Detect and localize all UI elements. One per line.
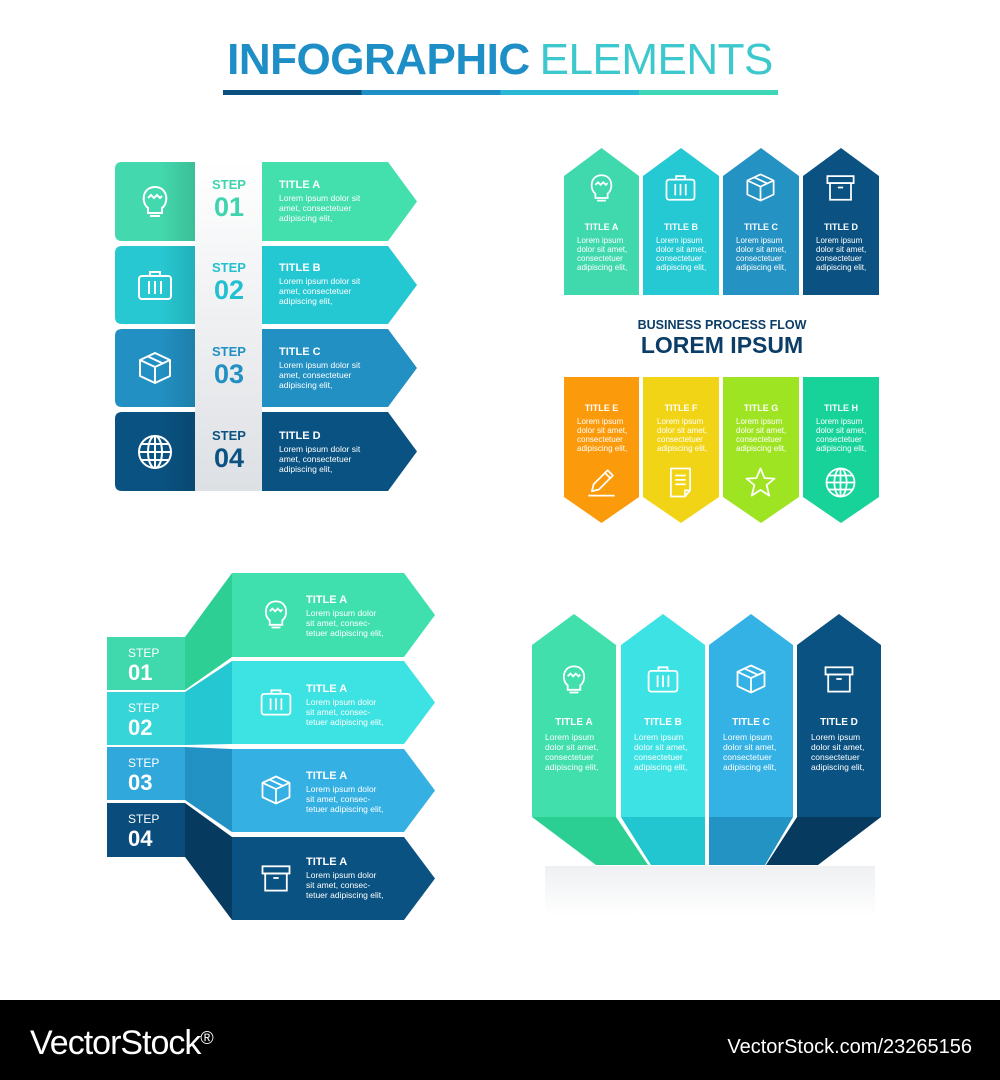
column F <box>643 377 719 523</box>
column C: dolor sit amet, <box>723 742 776 752</box>
column B: dolor sit amet, <box>634 742 687 752</box>
row 4 <box>107 803 435 920</box>
step 02 row: 02 <box>214 275 244 305</box>
column D: consectetuer <box>816 254 862 263</box>
column C <box>723 148 799 295</box>
column F: adipiscing elit, <box>657 444 707 453</box>
row 4: Lorem ipsum dolor <box>306 870 377 880</box>
column A <box>532 614 648 865</box>
row 1 <box>107 573 435 690</box>
column C: TITLE C <box>732 717 770 728</box>
step 01 row <box>115 162 417 241</box>
footer bar: VectorStock® <box>30 1024 213 1062</box>
row 4: STEP <box>128 812 159 826</box>
row 3 <box>107 747 435 832</box>
step 04 row: adipiscing elit, <box>279 464 332 474</box>
step 02 row: amet, consectetuer <box>279 286 351 296</box>
row 3: tetuer adipiscing elit, <box>306 804 384 814</box>
footer bar: VectorStock.com/23265156 <box>727 1036 972 1058</box>
title: INFOGRAPHICELEMENTS <box>227 35 773 84</box>
panel: business process flow top-right <box>564 148 879 523</box>
column F: dolor sit amet, <box>657 426 707 435</box>
column B <box>621 614 705 865</box>
step 01 row: adipiscing elit, <box>279 213 332 223</box>
step 04 row: TITLE D <box>279 430 321 442</box>
column A: consectetuer <box>545 752 594 762</box>
row 3: 03 <box>128 770 152 795</box>
row 4: 04 <box>128 826 153 851</box>
column E <box>564 377 639 523</box>
row 3: STEP <box>128 756 159 770</box>
panel: 3D columns bottom-right <box>532 614 881 916</box>
step 03 row: adipiscing elit, <box>279 380 332 390</box>
step 01 row: 01 <box>214 192 244 222</box>
row 3: sit amet, consec- <box>306 794 370 804</box>
column H: Lorem ipsum <box>816 417 863 426</box>
step 04 row: STEP <box>212 428 246 443</box>
step 02 row: Lorem ipsum dolor sit <box>279 276 361 286</box>
step 03 row <box>115 329 417 407</box>
row 1: sit amet, consec- <box>306 618 370 628</box>
column F: TITLE F <box>664 403 698 413</box>
row 2: tetuer adipiscing elit, <box>306 717 384 727</box>
column C: dolor sit amet, <box>736 245 786 254</box>
column A: dolor sit amet, <box>577 245 627 254</box>
column E: Lorem ipsum <box>577 417 624 426</box>
row 4: tetuer adipiscing elit, <box>306 890 384 900</box>
heading: business process flow: BUSINESS PROCESS FLOW <box>638 318 807 332</box>
footer bar <box>0 1000 1000 1080</box>
heading: business process flow <box>638 318 807 358</box>
row 2 <box>107 661 435 745</box>
column A: Lorem ipsum <box>545 732 594 742</box>
column B: Lorem ipsum <box>656 236 703 245</box>
column D: Lorem ipsum <box>811 732 860 742</box>
row 4: sit amet, consec- <box>306 880 370 890</box>
step 02 row: adipiscing elit, <box>279 296 332 306</box>
row 2: Lorem ipsum dolor <box>306 697 377 707</box>
column C <box>709 614 793 865</box>
step 01 row: TITLE A <box>279 179 320 191</box>
column C: consectetuer <box>723 752 772 762</box>
column D <box>803 148 879 295</box>
row 1: STEP <box>128 646 159 660</box>
heading: business process flow: LOREM IPSUM <box>641 332 803 358</box>
step 03 row: amet, consectetuer <box>279 370 351 380</box>
column C: Lorem ipsum <box>723 732 772 742</box>
column C: adipiscing elit, <box>723 762 776 772</box>
column A: dolor sit amet, <box>545 742 598 752</box>
step 03 row: STEP <box>212 344 246 359</box>
step 03 row: TITLE C <box>279 346 321 358</box>
panel: folded step arrows bottom-left <box>107 573 435 920</box>
column B: dolor sit amet, <box>656 245 706 254</box>
column G <box>723 377 799 523</box>
step 02 row <box>115 246 417 324</box>
column D: adipiscing elit, <box>811 762 864 772</box>
step 04 row: Lorem ipsum dolor sit <box>279 444 361 454</box>
column D: dolor sit amet, <box>816 245 866 254</box>
column B: TITLE B <box>664 222 698 232</box>
column D: consectetuer <box>811 752 860 762</box>
step 02 row: TITLE B <box>279 262 321 274</box>
row 1: Lorem ipsum dolor <box>306 608 377 618</box>
column D: Lorem ipsum <box>816 236 863 245</box>
step 03 row: 03 <box>214 359 244 389</box>
column C: Lorem ipsum <box>736 236 783 245</box>
step 01 row: amet, consectetuer <box>279 203 351 213</box>
row 2: STEP <box>128 701 159 715</box>
row 3: TITLE A <box>306 770 347 782</box>
column D: dolor sit amet, <box>811 742 864 752</box>
row 2: 02 <box>128 715 152 740</box>
row 2: sit amet, consec- <box>306 707 370 717</box>
column H: adipiscing elit, <box>816 444 866 453</box>
column A <box>564 148 639 295</box>
row 1: TITLE A <box>306 594 347 606</box>
column H: TITLE H <box>824 403 858 413</box>
column G: dolor sit amet, <box>736 426 786 435</box>
step 02 row: STEP <box>212 260 246 275</box>
step 01 row: STEP <box>212 177 246 192</box>
column E: adipiscing elit, <box>577 444 627 453</box>
column G: Lorem ipsum <box>736 417 783 426</box>
column B <box>643 148 719 295</box>
column C: adipiscing elit, <box>736 263 786 272</box>
column D <box>766 614 881 865</box>
column C: consectetuer <box>736 254 782 263</box>
column A: adipiscing elit, <box>545 762 598 772</box>
column D: adipiscing elit, <box>816 263 866 272</box>
column A: consectetuer <box>577 254 623 263</box>
column H <box>803 377 879 523</box>
column B: TITLE B <box>644 717 682 728</box>
row 2: TITLE A <box>306 683 347 695</box>
column E: TITLE E <box>585 403 618 413</box>
column D: TITLE D <box>824 222 858 232</box>
step 01 row: Lorem ipsum dolor sit <box>279 193 361 203</box>
column D: TITLE D <box>820 717 858 728</box>
column F: consectetuer <box>657 435 703 444</box>
column A: TITLE A <box>555 717 593 728</box>
column B: adipiscing elit, <box>656 263 706 272</box>
column G: TITLE G <box>744 403 778 413</box>
step 04 row: amet, consectetuer <box>279 454 351 464</box>
column E: dolor sit amet, <box>577 426 627 435</box>
column A: Lorem ipsum <box>577 236 624 245</box>
column C: TITLE C <box>744 222 778 232</box>
row 4: TITLE A <box>306 856 347 868</box>
row 1: 01 <box>128 660 152 685</box>
column B: adipiscing elit, <box>634 762 687 772</box>
column A: TITLE A <box>585 222 619 232</box>
column F: Lorem ipsum <box>657 417 704 426</box>
step 04 row <box>115 412 417 491</box>
column G: consectetuer <box>736 435 782 444</box>
panel: steps list top-left <box>115 162 417 491</box>
row 1: tetuer adipiscing elit, <box>306 628 384 638</box>
column E: consectetuer <box>577 435 623 444</box>
column H: consectetuer <box>816 435 862 444</box>
row 3: Lorem ipsum dolor <box>306 784 377 794</box>
column B: Lorem ipsum <box>634 732 683 742</box>
column B: consectetuer <box>634 752 683 762</box>
step 04 row: 04 <box>214 443 244 473</box>
column H: dolor sit amet, <box>816 426 866 435</box>
column B: consectetuer <box>656 254 702 263</box>
column G: adipiscing elit, <box>736 444 786 453</box>
step 03 row: Lorem ipsum dolor sit <box>279 360 361 370</box>
column A: adipiscing elit, <box>577 263 627 272</box>
